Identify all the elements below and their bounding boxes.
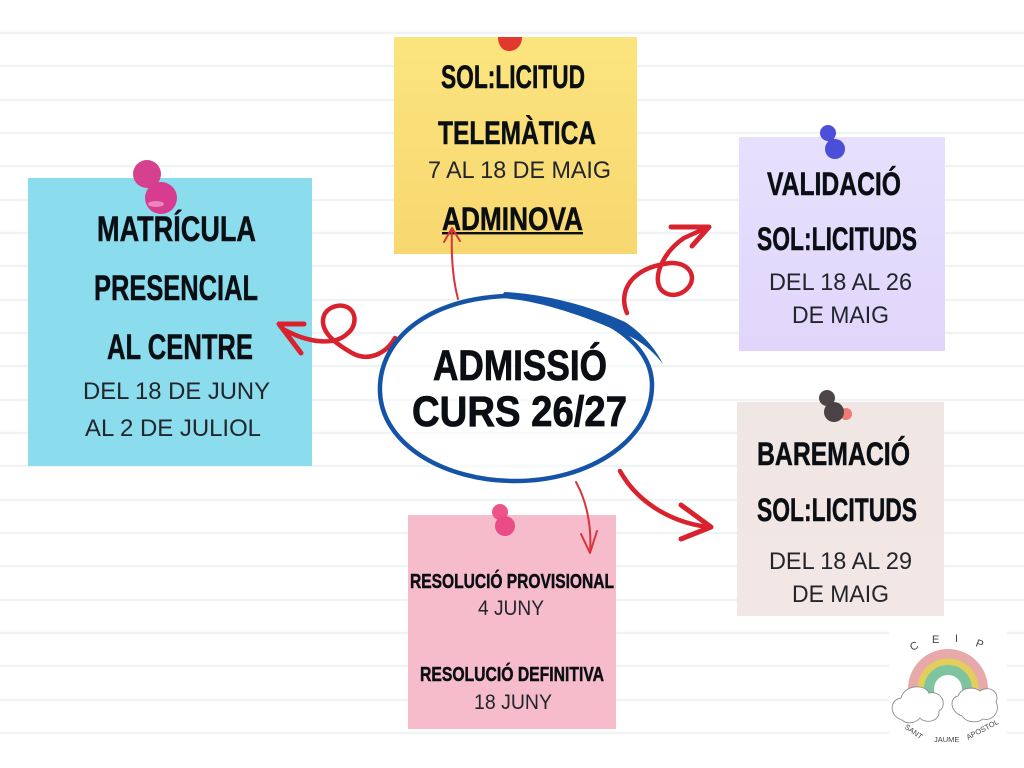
oval outline (380, 296, 652, 481)
dates: sol·licitud: 7 AL 18 DE MAIG (428, 157, 611, 184)
logo text (903, 633, 1000, 744)
logo text: I (955, 633, 958, 645)
clouds (892, 687, 997, 723)
dates: validació: DE MAIG (792, 302, 889, 329)
arrow: to validació (624, 227, 709, 313)
icon: dark pin (819, 390, 852, 422)
panel: sol·licitud telemàtica (394, 37, 637, 254)
note: pink sticky (408, 515, 616, 729)
heading: matrícula presencial al centre: MATRÍCULA (97, 209, 256, 249)
note: yellow sticky (394, 37, 637, 254)
heading: validació sol·licituds: SOL:LICITUDS (757, 221, 917, 257)
dates: validació (769, 269, 912, 329)
rainbow (913, 654, 983, 708)
heading: matrícula presencial al centre: PRESENCIAL (94, 269, 258, 308)
logo text: JAUME (934, 735, 959, 744)
panel: validació sol·licituds (739, 125, 945, 351)
heading: baremació sol·licituds (757, 436, 917, 528)
central title oval (380, 292, 663, 481)
text: resolució definitiva: RESOLUCIÓ DEFINITIVA (420, 662, 604, 686)
title text (412, 341, 627, 436)
text: resolució provisional: RESOLUCIÓ PROVISIONAL (410, 569, 614, 593)
note: purple sticky (739, 137, 945, 351)
heading: baremació sol·licituds: BAREMACIÓ (757, 436, 910, 472)
heading: validació sol·licituds: VALIDACIÓ (767, 166, 901, 202)
heading: matrícula presencial al centre (94, 209, 258, 367)
text: resolució provisional (410, 569, 614, 620)
heading: matrícula presencial al centre: AL CENTRE (107, 328, 253, 367)
dates: baremació: DE MAIG (792, 581, 889, 608)
logo text: APOSTOL (965, 717, 1000, 742)
note: blue sticky (28, 178, 312, 466)
heading: validació sol·licituds (757, 166, 917, 257)
text: resolució definitiva: 18 JUNY (474, 691, 552, 714)
logo text: E (932, 634, 939, 646)
panel: baremació sol·licituds (737, 390, 944, 616)
dates: matrícula (83, 378, 270, 442)
text: resolució definitiva (420, 662, 604, 714)
dates: matrícula: AL 2 DE JULIOL (85, 415, 261, 442)
logo: CEIP Sant Jaume Apòstol (889, 628, 1007, 752)
arrow: to baremació (620, 471, 711, 539)
icon: blue pin (820, 125, 845, 159)
link: adminova: ADMINOVA (442, 201, 583, 237)
note: beige sticky (737, 402, 944, 616)
brush flourish (503, 292, 663, 364)
logo text: SANT (903, 722, 925, 741)
heading: sol·licitud telemàtica (438, 59, 596, 151)
dates: matrícula: DEL 18 DE JUNY (83, 378, 270, 405)
arrow: to sol·licitud (444, 228, 460, 299)
icon: magenta pin (133, 160, 177, 214)
panel: resolució (408, 504, 616, 729)
panel: matrícula (28, 160, 312, 466)
heading: sol·licitud telemàtica: TELEMÀTICA (438, 115, 596, 151)
heading: sol·licitud telemàtica: SOL:LICITUD (441, 59, 585, 95)
dates: validació: DEL 18 AL 26 (769, 269, 912, 296)
dates: baremació (769, 548, 912, 608)
arrow: to resolució (576, 482, 597, 553)
heading: baremació sol·licituds: SOL:LICITUDS (757, 492, 917, 528)
icon: pink pin (492, 504, 515, 536)
dates: baremació: DEL 18 AL 29 (769, 548, 912, 575)
title text: CURS 26/27 (412, 388, 627, 436)
text: resolució provisional: 4 JUNY (478, 597, 544, 620)
logo text: C (908, 639, 921, 654)
arrow: to matrícula (279, 306, 395, 357)
icon: red pin (498, 37, 522, 51)
logo text: P (974, 638, 985, 651)
title text: ADMISSIÓ (433, 341, 607, 390)
